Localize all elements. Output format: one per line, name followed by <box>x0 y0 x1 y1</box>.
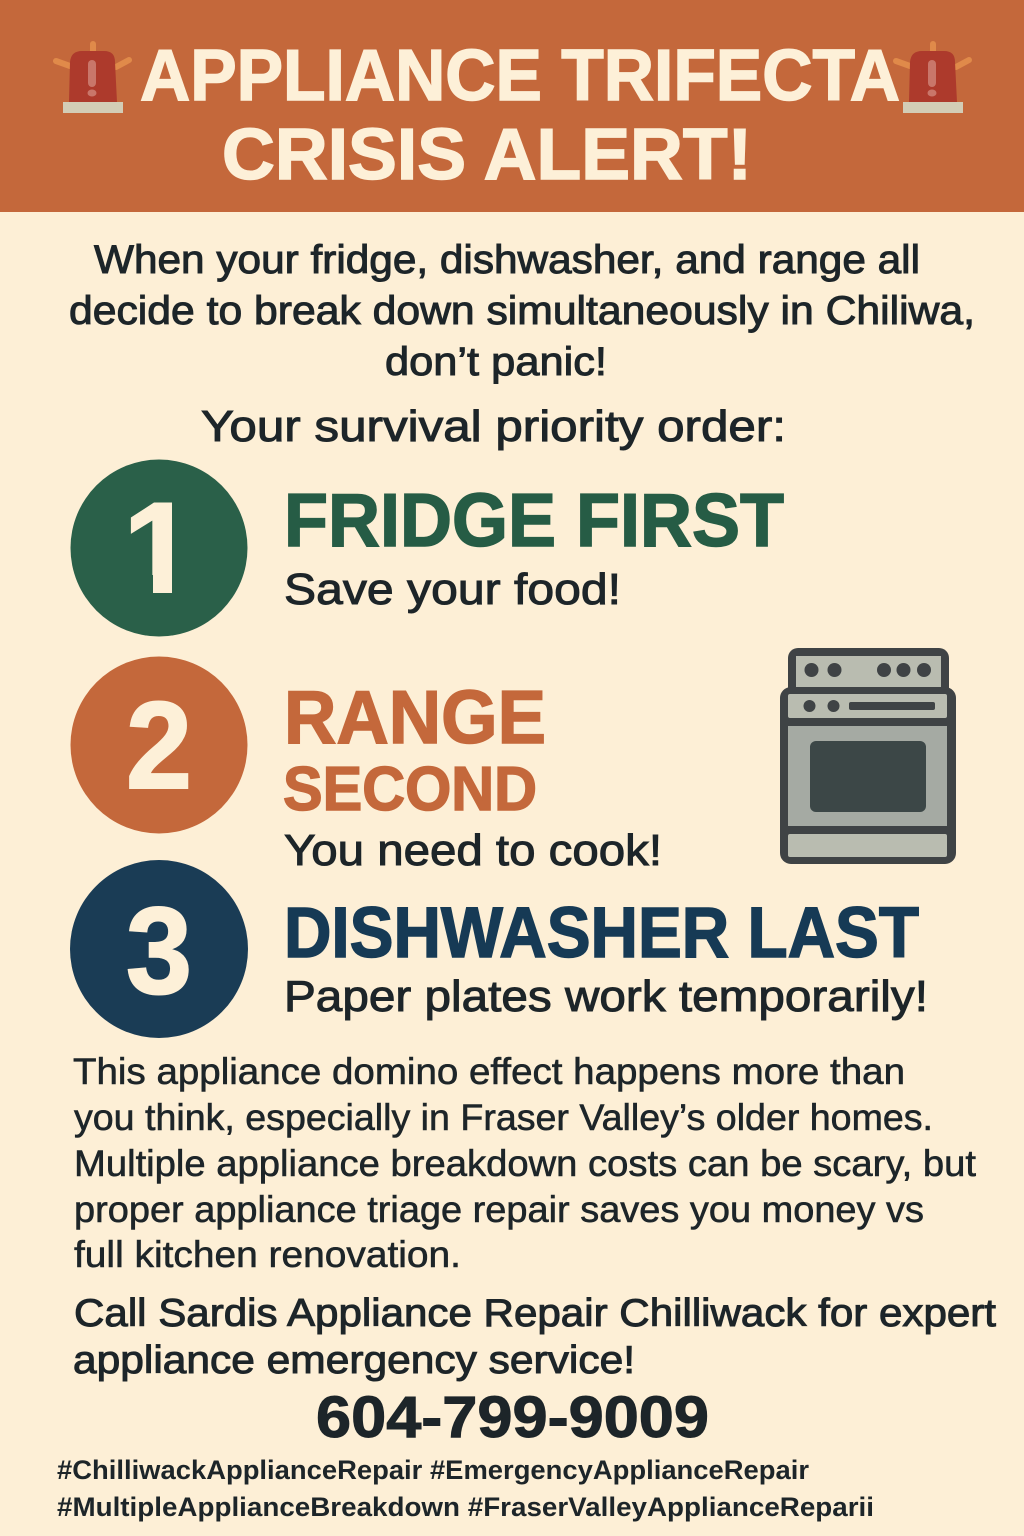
explanation paragraph: Multiple appliance breakdown costs can be scary, but <box>74 1143 977 1184</box>
number badge 1: 1 <box>123 475 195 621</box>
step 2 description: You need to cook! <box>284 826 662 875</box>
hashtags <box>57 1455 874 1522</box>
icon: right alarm siren <box>896 44 969 113</box>
explanation paragraph: you think, especially in Fraser Valley’s older homes. <box>74 1097 933 1138</box>
title <box>140 36 900 195</box>
intro text: When your fridge, dishwasher, and range all <box>94 238 920 282</box>
step 3 heading: DISHWASHER LAST <box>284 894 919 973</box>
title: CRISIS ALERT! <box>222 115 752 195</box>
step 1 heading: FRIDGE FIRST <box>284 478 784 562</box>
phone number: 604-799-9009 <box>316 1385 709 1450</box>
icon: left alarm siren <box>56 44 129 113</box>
explanation paragraph: This appliance domino effect happens more than <box>73 1051 905 1092</box>
intro text: decide to break down simultaneously in Chiliwa, <box>69 289 975 333</box>
title: APPLIANCE TRIFECTA <box>140 36 900 116</box>
step 2: range second <box>70 656 662 875</box>
call to action <box>73 1292 996 1382</box>
intro text <box>69 238 975 384</box>
step 3 description: Paper plates work temporarily! <box>284 972 928 1021</box>
intro text: don’t panic! <box>385 340 607 384</box>
step 1: fridge first <box>70 460 784 636</box>
step 2 heading: RANGE <box>284 675 546 759</box>
number badge 3: 3 <box>126 883 192 1020</box>
hashtags: #MultipleApplianceBreakdown #FraserValleyApplianceReparii <box>57 1492 874 1522</box>
call to action: Call Sardis Appliance Repair Chilliwack for expert <box>74 1292 996 1335</box>
number badge 2: 2 <box>126 678 192 815</box>
step 3: dishwasher last <box>70 860 928 1038</box>
icon: kitchen range <box>780 648 956 864</box>
step 2 heading <box>283 675 546 824</box>
number badge 1 <box>70 460 248 636</box>
header banner <box>0 0 1024 212</box>
step 1 description: Save your food! <box>284 565 621 614</box>
number badge 2 <box>70 656 248 834</box>
step 2 heading: SECOND <box>283 755 537 824</box>
explanation paragraph: proper appliance triage repair saves you money vs <box>74 1189 924 1230</box>
explanation paragraph: full kitchen renovation. <box>74 1234 461 1275</box>
explanation paragraph <box>73 1051 977 1275</box>
hashtags: #ChilliwackApplianceRepair #EmergencyApplianceRepair <box>57 1455 809 1485</box>
call to action: appliance emergency service! <box>73 1339 635 1382</box>
number badge 3 <box>70 860 248 1038</box>
subheading: Your survival priority order: <box>201 402 786 451</box>
